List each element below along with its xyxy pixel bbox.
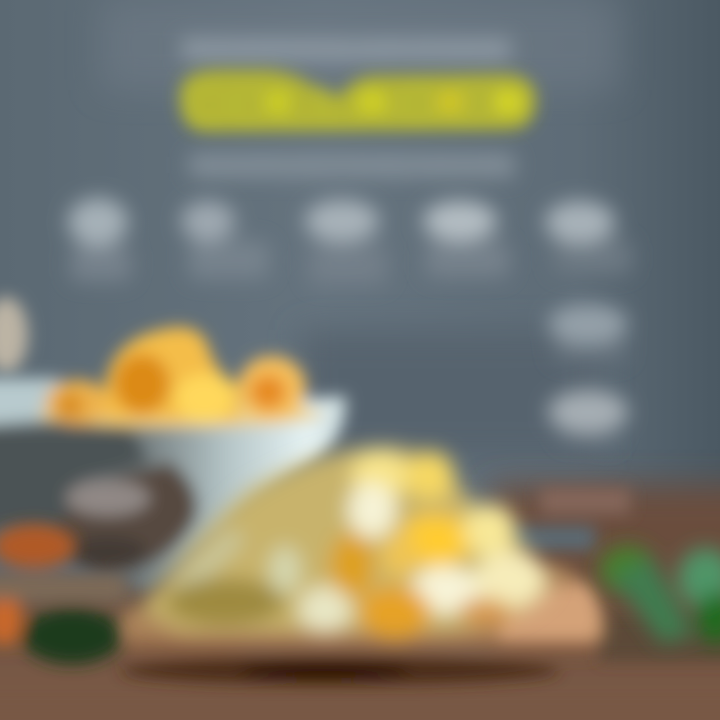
collagen highlighted word: COLLAGEN	[181, 76, 531, 136]
wooden board	[120, 565, 605, 684]
benefit 6	[548, 304, 628, 363]
bowl label: Bone	[87, 489, 129, 509]
carrot pieces and herbs left	[0, 524, 125, 664]
bowl label	[66, 480, 150, 516]
bowl body	[0, 396, 346, 590]
benefit 5: Gut	[569, 243, 611, 270]
herbs right	[600, 546, 720, 644]
wooden table	[0, 485, 720, 720]
benefit 2: Joints	[193, 243, 263, 270]
benefit 7: Energy	[559, 428, 621, 448]
benefit 5	[545, 201, 632, 274]
benefit 6: Muscle	[556, 341, 624, 363]
heading	[180, 31, 536, 180]
benefit 2	[181, 201, 270, 280]
bowl rim left	[0, 378, 60, 426]
dark brown lower bowl	[40, 462, 197, 575]
food base	[38, 401, 322, 427]
left jar edge	[0, 297, 28, 373]
bowl dark reflection	[0, 428, 150, 530]
benefit 4	[423, 201, 510, 278]
benefit 1	[68, 198, 132, 282]
benefit 7	[548, 390, 628, 448]
benefit 3: Hair	[322, 249, 368, 276]
food chunks	[46, 327, 306, 424]
title line: BENEFITS OF FOOD	[180, 31, 514, 67]
table highlights	[505, 488, 720, 660]
subtitle line: Nourish your body naturally	[187, 150, 518, 180]
benefit 1: Skin	[77, 248, 123, 273]
pile of yellow food	[140, 447, 552, 638]
benefit 4: Bones	[428, 243, 502, 270]
benefit 3	[305, 200, 388, 285]
bowl of yellow food	[0, 327, 346, 590]
benefit row	[68, 198, 632, 448]
